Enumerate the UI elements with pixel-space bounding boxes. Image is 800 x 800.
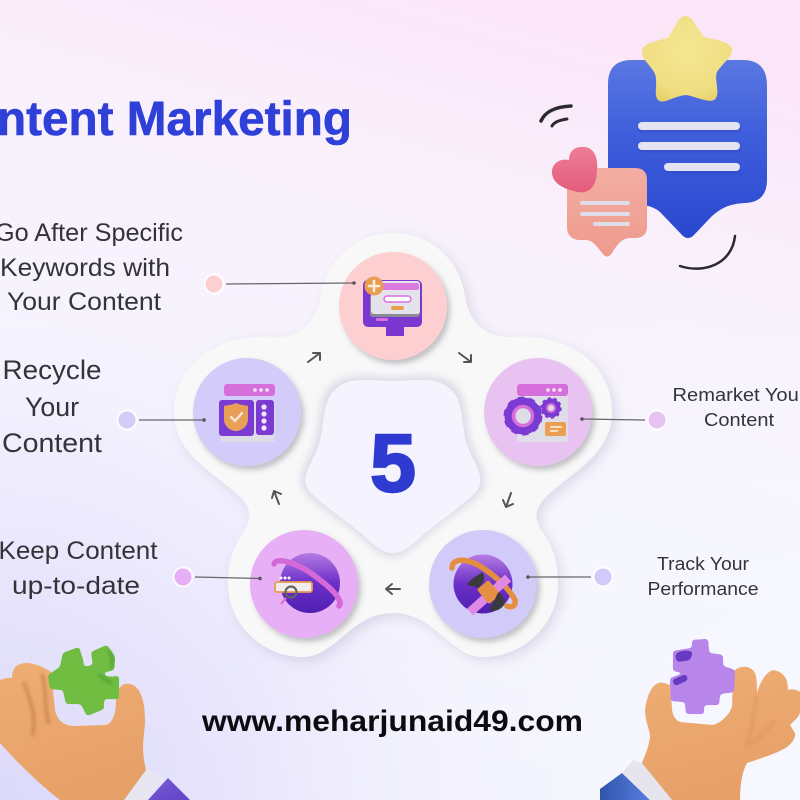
text: keep content up-to-date (0, 537, 158, 600)
text: recycle your content: Your (25, 392, 79, 422)
text: keep content up-to-date: Keep Content (0, 537, 158, 565)
icon: chat bubbles with star and heart (541, 16, 767, 269)
connector: bottom left (172, 566, 262, 588)
icon: monitor (363, 276, 422, 336)
text: go after specific keywords: Keywords with (0, 254, 170, 282)
text: remarket your content: Remarket Your (672, 385, 800, 405)
left sleeve (148, 778, 190, 800)
text: keep content up-to-date: up-to-date (12, 572, 140, 600)
arrow: bottom right to bottom left (386, 584, 400, 594)
connector: bottom right (526, 566, 614, 588)
icon: heart (552, 147, 597, 192)
icon: search planet (274, 553, 340, 613)
icon: yellow star (642, 16, 732, 102)
text: track your performance (648, 554, 758, 599)
title: ntent Marketing (0, 93, 352, 146)
icon: peach bubble text lines (580, 201, 630, 226)
text: go after specific keywords: Go After Specific (0, 219, 183, 247)
green puzzle piece (48, 645, 119, 716)
arrow: top to right (459, 353, 471, 362)
node: right circle (484, 358, 592, 466)
left cuff (124, 768, 164, 800)
right hand (642, 667, 800, 800)
icon: bubble text lines (638, 122, 740, 171)
text: go after specific keywords (0, 219, 183, 316)
left hand (0, 663, 146, 800)
arrow: right to bottom right (503, 493, 513, 507)
right sleeve (600, 773, 650, 800)
text: recycle your content: Content (2, 428, 103, 458)
icon: shield window (219, 384, 275, 442)
node: left circle (193, 358, 301, 466)
icon: gears window (506, 384, 568, 442)
icon: right hand with purple puzzle piece (600, 639, 800, 800)
arrow: bottom left to left (272, 491, 281, 504)
connector: right (580, 410, 668, 430)
ring panel (174, 233, 612, 657)
connector: left (116, 410, 206, 430)
text: recycle your content: Recycle (2, 355, 102, 385)
text: go after specific keywords: Your Content (7, 288, 161, 316)
node: bottom left circle (250, 530, 358, 638)
icon: left hand with green puzzle piece (0, 645, 190, 800)
icon: peach speech bubble (567, 168, 647, 256)
connector: top (204, 274, 356, 294)
number 5: 5 (370, 418, 416, 509)
node: top circle (339, 252, 447, 360)
arrow: left to top (308, 353, 320, 362)
icon: blue speech bubble (608, 60, 767, 238)
text: track your performance: Performance (648, 579, 758, 599)
text: recycle your content (2, 355, 103, 458)
purple puzzle piece (670, 639, 735, 714)
text: remarket your content (672, 385, 800, 430)
arrows between nodes (272, 353, 513, 594)
text: remarket your content: Content (704, 410, 774, 430)
text: track your performance: Track Your (657, 554, 749, 574)
node: bottom right circle (429, 530, 537, 638)
website url: www.meharjunaid49.com (201, 705, 583, 738)
icon: satellite planet (452, 554, 515, 614)
right cuff (622, 760, 672, 800)
icon: curved accent stroke bottom (680, 236, 735, 269)
ring inner hole (301, 376, 485, 557)
icon: curved accent strokes top (541, 106, 571, 126)
